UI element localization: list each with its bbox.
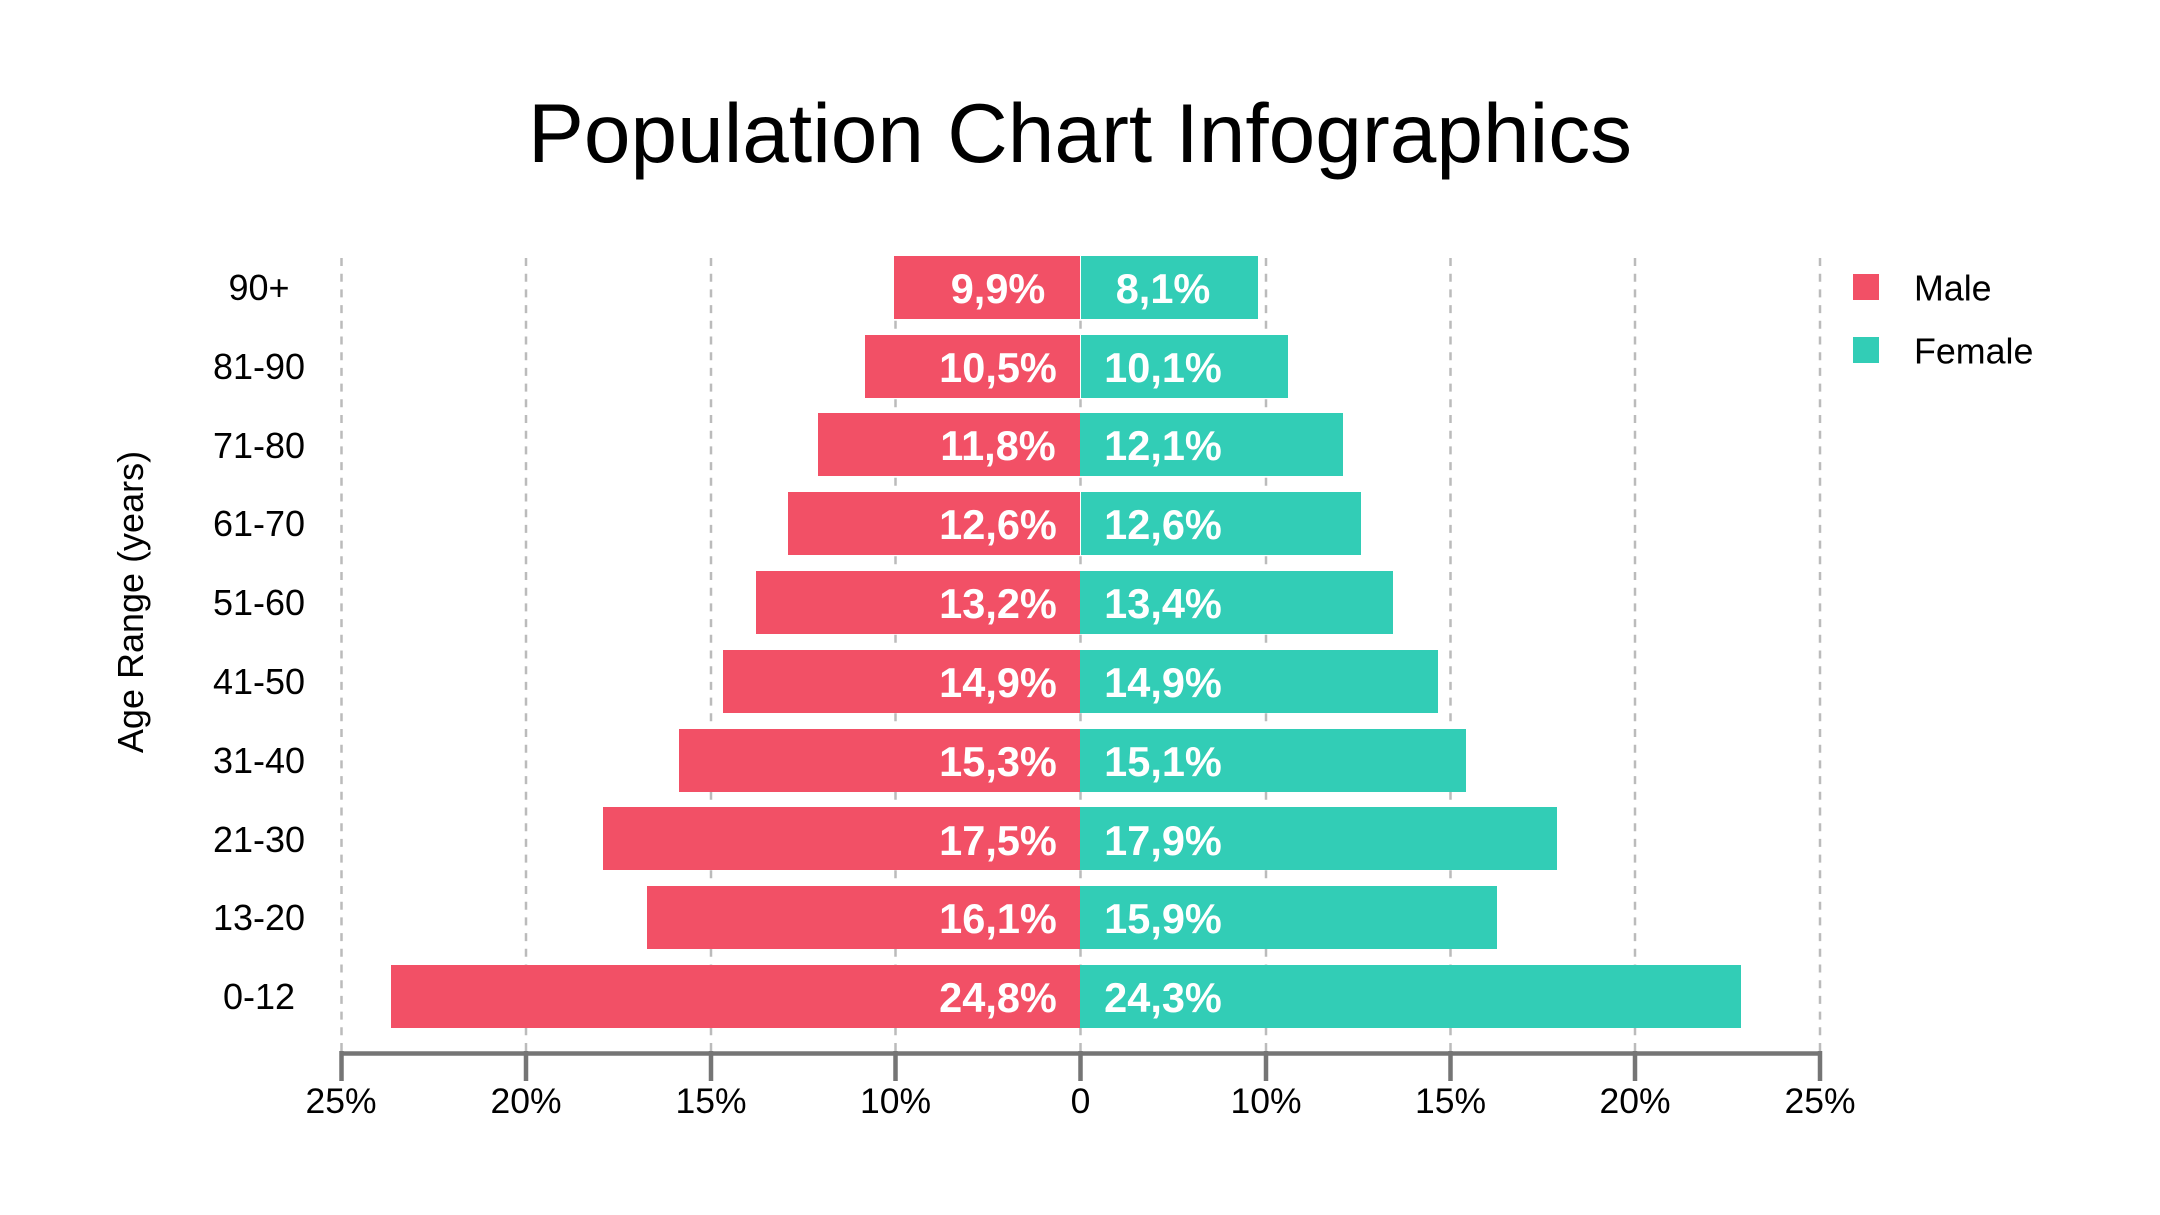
row: 81-90: 10,1%: [1104, 344, 1222, 391]
legend item: male: Male: [1914, 268, 1992, 308]
row: 81-90: 10,5%: [939, 344, 1057, 391]
row: 90+: 90+: [228, 267, 290, 308]
row: 61-70: 12,6%: [1104, 501, 1222, 548]
row: 71-80: 11,8%: [940, 422, 1056, 469]
row: 71-80: 71-80: [213, 425, 305, 466]
row: 21-30: 21-30: [213, 819, 305, 860]
row: 41-50: 14,9%: [939, 659, 1057, 706]
legend item: female: Female: [1914, 332, 2033, 372]
x axis: 15%: [1415, 1081, 1486, 1121]
row: 61-70: [213, 492, 1361, 555]
row: 61-70: 12,6%: [939, 501, 1057, 548]
row: 81-90: 81-90: [213, 346, 305, 387]
x axis: 25%: [305, 1081, 377, 1121]
x axis: 10%: [1230, 1081, 1302, 1121]
legend: [1853, 268, 2033, 372]
x axis: 0: [1071, 1081, 1090, 1121]
row: 51-60: 13,2%: [939, 580, 1057, 627]
x axis: 15%: [675, 1081, 747, 1121]
legend item: male: [1853, 268, 1992, 308]
row: 0-12: 0-12: [223, 976, 295, 1017]
legend item: female: [1853, 332, 2033, 372]
row: 41-50: 41-50: [213, 661, 305, 702]
row: 90+: [228, 256, 1258, 319]
row: 51-60: 13,4%: [1104, 580, 1222, 627]
row: 13-20: 16,1%: [939, 895, 1057, 942]
x axis: 20%: [490, 1081, 562, 1121]
row: 31-40: [213, 729, 1466, 792]
row: 21-30: 17,9%: [1104, 817, 1222, 864]
row: 31-40: 31-40: [213, 740, 305, 781]
x axis: 10%: [860, 1081, 931, 1121]
row: 81-90: [213, 335, 1288, 398]
row: 90+: 9,9%: [951, 265, 1045, 312]
row: 41-50: [213, 650, 1438, 713]
x axis: 25%: [1784, 1081, 1856, 1121]
row: 61-70: 61-70: [213, 503, 305, 544]
population pyramid bars: [213, 256, 1741, 1028]
row: 31-40: 15,1%: [1104, 738, 1222, 785]
row: 0-12: [223, 965, 1741, 1028]
row: 21-30: [213, 807, 1557, 870]
x axis: [305, 1051, 1856, 1121]
title: Population Chart Infographics: [528, 86, 1632, 180]
row: 51-60: 51-60: [213, 582, 305, 623]
x axis: 20%: [1599, 1081, 1671, 1121]
row: 0-12: 24,3%: [1104, 974, 1222, 1021]
row: 21-30: 17,5%: [939, 817, 1057, 864]
row: 90+: 8,1%: [1116, 265, 1210, 312]
row: 13-20: 13-20: [213, 897, 305, 938]
row: 71-80: [213, 413, 1343, 476]
row: 71-80: 12,1%: [1104, 422, 1222, 469]
row: 13-20: 15,9%: [1104, 895, 1222, 942]
row: 41-50: 14,9%: [1104, 659, 1222, 706]
row: 13-20: [213, 886, 1497, 949]
row: 31-40: 15,3%: [939, 738, 1057, 785]
y axis title: Age Range (years): [110, 451, 151, 753]
row: 51-60: [213, 571, 1393, 634]
row: 0-12: 24,8%: [939, 974, 1057, 1021]
